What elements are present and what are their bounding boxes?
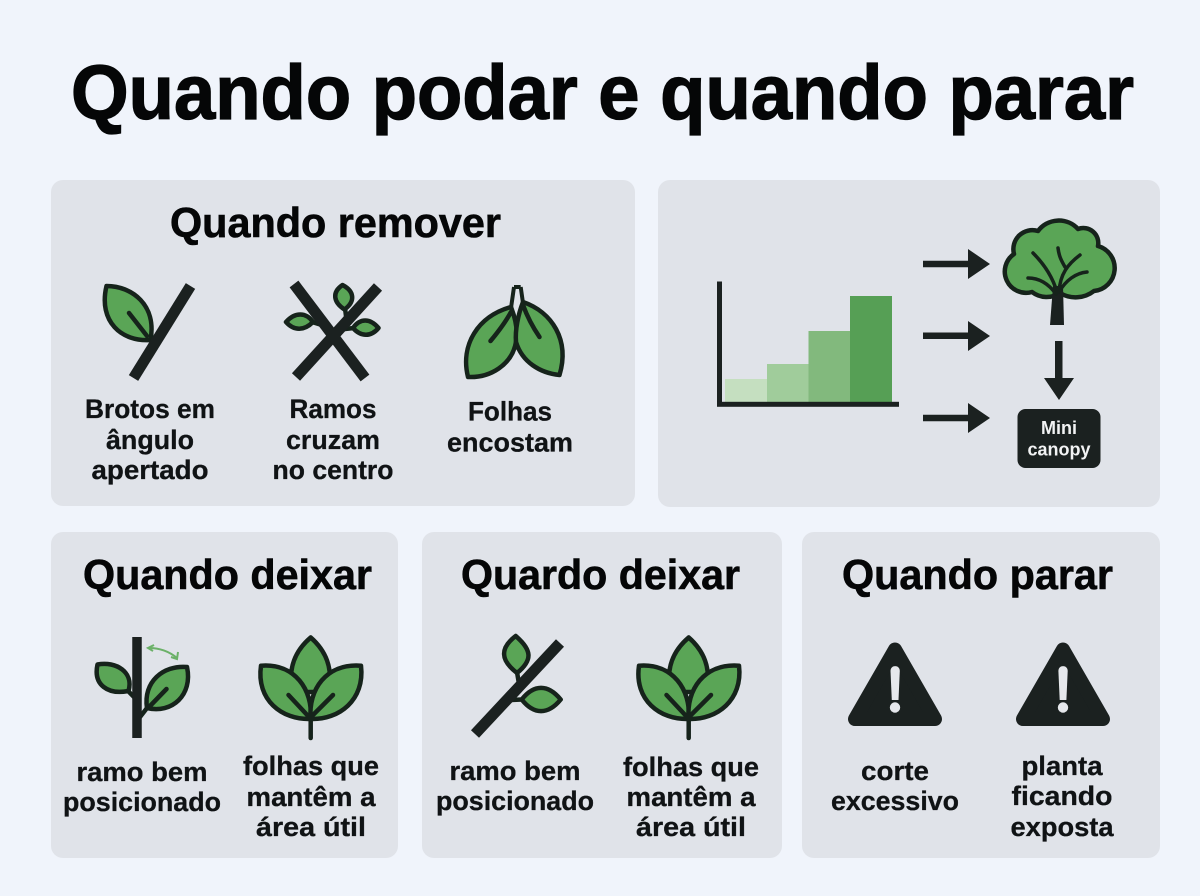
label: folhas que mantem a area util: folhas que <box>623 752 759 782</box>
icon: three leaves <box>260 638 361 738</box>
label: brotos em angulo apertado: Brotos em <box>85 394 215 424</box>
label: folhas encostam: Folhas <box>468 396 552 426</box>
arrow: down <box>1044 341 1074 400</box>
heading: quando deixar: Quando deixar <box>83 551 372 598</box>
icon: shoot at tight angle <box>105 286 190 378</box>
label: folhas que mantem a area util: mantêm a <box>626 782 756 812</box>
label: ramos cruzam no centro: Ramos <box>290 394 376 424</box>
label: ramo bem posicionado: ramo bem <box>76 757 208 787</box>
arrow: bottom <box>923 403 990 433</box>
panel: chart and flow <box>658 180 1160 507</box>
label: corte excessivo <box>831 756 959 816</box>
label: planta ficando exposta: planta <box>1022 751 1103 781</box>
panel: quando remover <box>51 180 635 506</box>
label: ramo bem posicionado <box>63 757 221 817</box>
icon: crossing branches <box>286 284 378 378</box>
label: planta ficando exposta <box>1010 751 1114 842</box>
label: corte excessivo: excessivo <box>831 786 959 816</box>
icon: touching leaves <box>466 287 563 377</box>
label: ramo bem posicionado: posicionado <box>63 787 221 817</box>
icon: warning triangle <box>1023 650 1103 719</box>
label: brotos em angulo apertado <box>85 394 215 485</box>
label: planta ficando exposta: ficando <box>1012 781 1112 811</box>
label: folhas que mantem a area util <box>243 751 379 842</box>
panel: quando deixar <box>51 532 398 858</box>
panel: quando parar <box>802 532 1160 858</box>
label: brotos em angulo apertado: apertado <box>92 455 208 485</box>
label: ramo bem posicionado <box>436 756 594 816</box>
heading: quando parar: Quando parar <box>842 551 1113 598</box>
icon: well positioned branch <box>97 637 188 738</box>
label: folhas que mantem a area util: área útil <box>256 812 366 842</box>
label: planta ficando exposta: exposta <box>1010 812 1114 842</box>
label: corte excessivo: corte <box>861 756 929 786</box>
bar chart <box>717 282 899 407</box>
heading: quando remover: Quando remover <box>170 199 501 246</box>
icon: tree <box>1005 221 1115 325</box>
badge: mini canopy <box>1018 409 1100 468</box>
label: ramo bem posicionado: posicionado <box>436 786 594 816</box>
badge: mini canopy: Mini <box>1041 418 1077 438</box>
label: brotos em angulo apertado: ângulo <box>106 425 194 455</box>
label: folhas que mantem a area util: mantêm a <box>246 782 376 812</box>
icon: branch with two leaves <box>475 636 561 734</box>
label: folhas encostam <box>447 396 573 458</box>
badge: mini canopy: canopy <box>1027 440 1091 460</box>
title: Quando podar e quando parar <box>71 50 1134 136</box>
icon: three leaves <box>638 638 739 738</box>
heading: quardo deixar: Quardo deixar <box>461 551 740 598</box>
arrow: middle <box>923 321 990 351</box>
arrow: top <box>923 249 990 279</box>
label: folhas que mantem a area util <box>623 752 759 842</box>
label: ramos cruzam no centro: cruzam <box>286 425 380 455</box>
icon: warning triangle <box>855 650 935 719</box>
label: ramo bem posicionado: ramo bem <box>450 756 580 786</box>
label: folhas que mantem a area util: área útil <box>636 812 746 842</box>
panel: quardo deixar <box>422 532 782 858</box>
label: ramos cruzam no centro <box>272 394 394 485</box>
label: folhas que mantem a area util: folhas que <box>243 751 379 781</box>
label: folhas encostam: encostam <box>447 428 573 458</box>
label: ramos cruzam no centro: no centro <box>272 455 394 485</box>
